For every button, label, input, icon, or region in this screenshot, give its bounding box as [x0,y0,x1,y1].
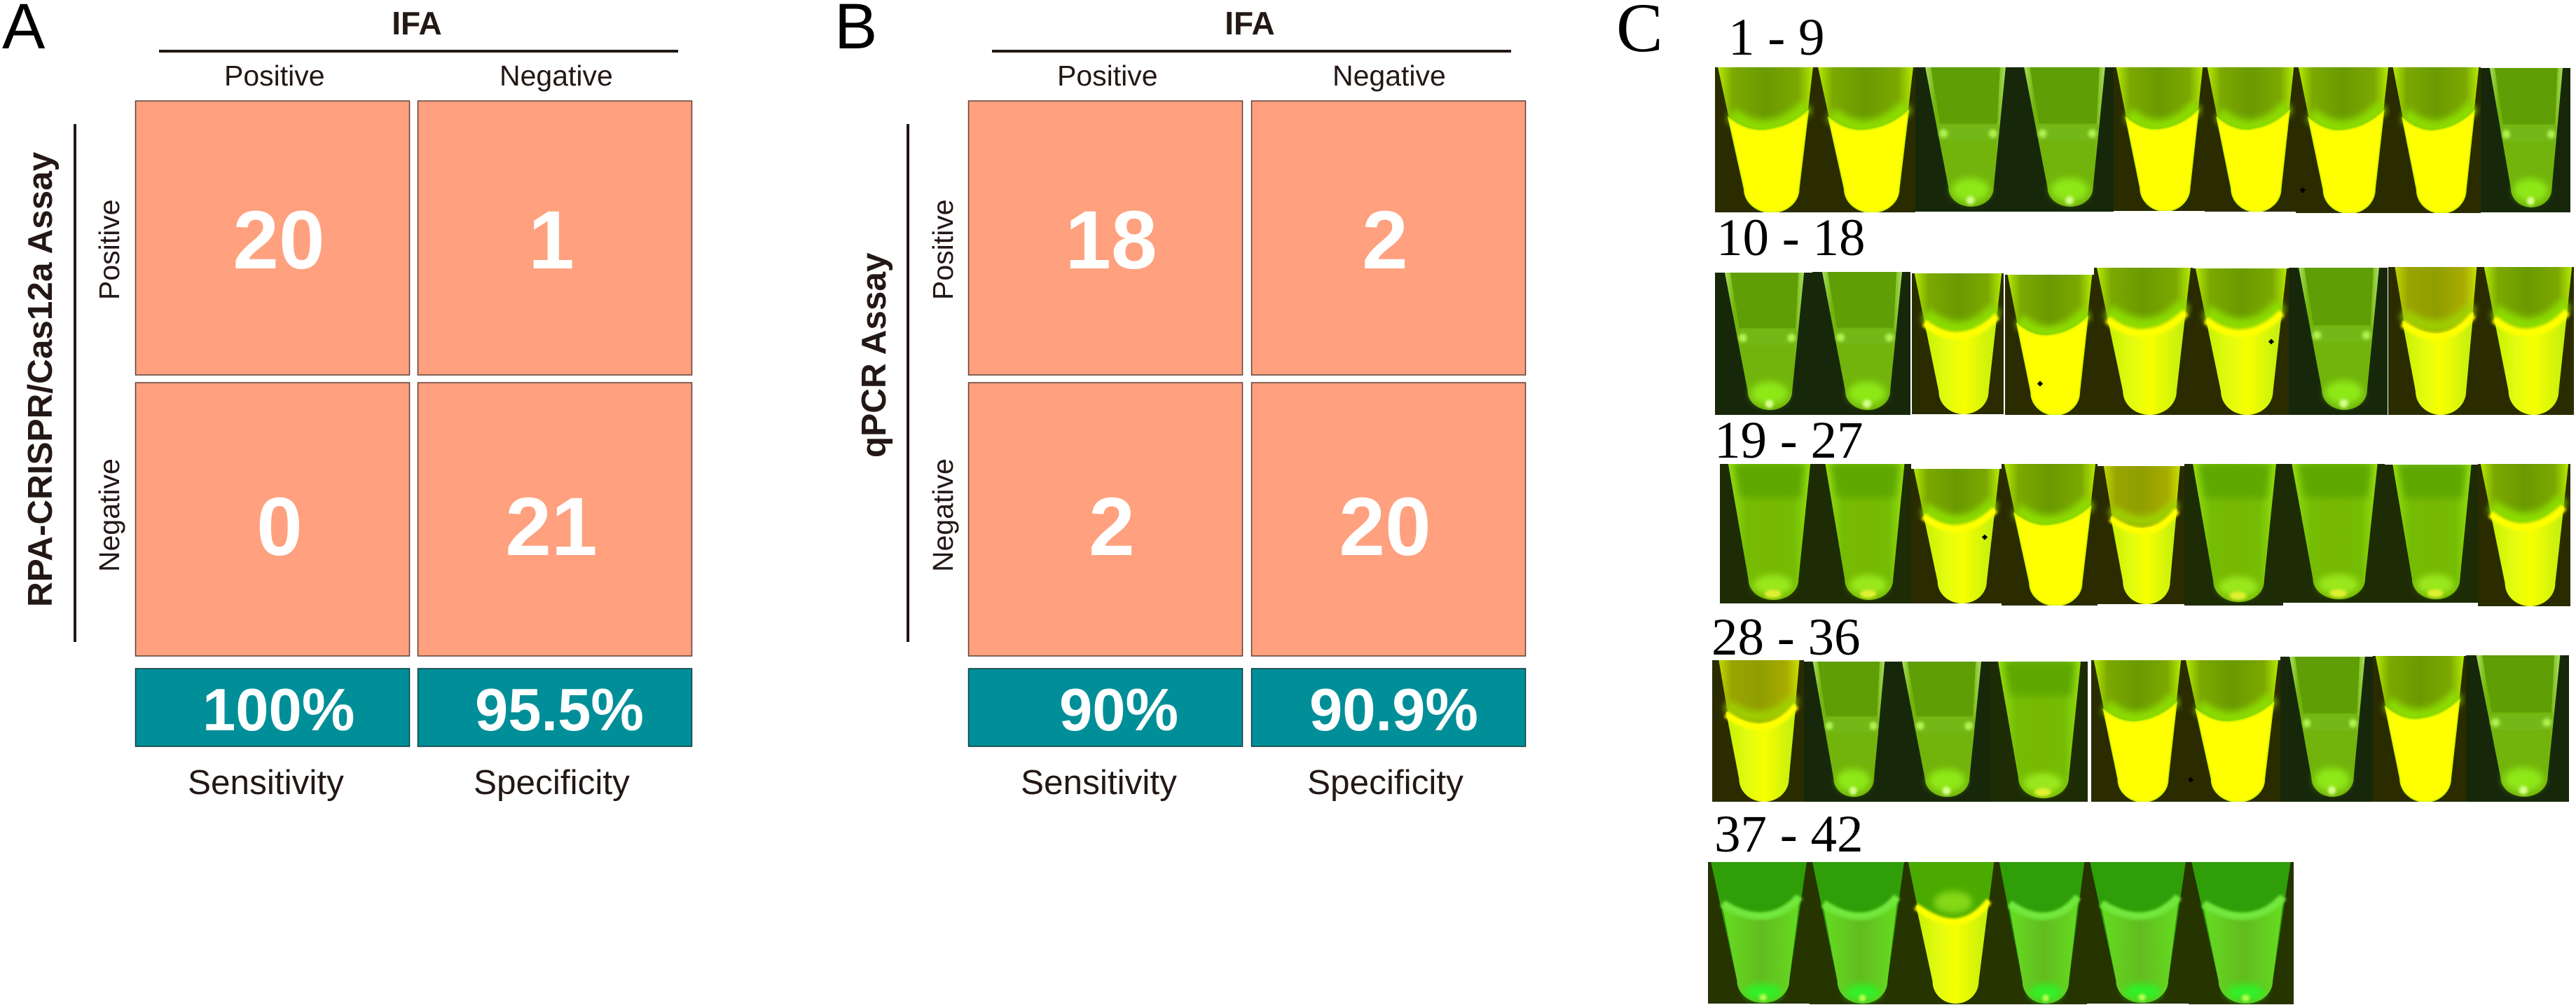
row label 1 - 9: 1 - 9 [1728,8,1824,67]
heading: IFA: IFA [392,5,442,41]
cell: true negative 20: 20 [1339,481,1431,573]
column label: Negative: Negative [500,60,613,92]
cell: false positive 1 [418,101,692,375]
caption: Sensitivity: Sensitivity [188,763,344,802]
specificity value 90.9% [1251,669,1526,746]
caption: Specificity: Specificity [474,763,630,802]
row label: Negative: Negative [927,458,959,572]
sensitivity value 90%: 90% [1059,677,1178,744]
column label: Negative: Negative [1332,60,1446,92]
cell: false positive 1: 1 [528,194,574,287]
sensitivity value 100%: 100% [202,677,354,744]
row title: RPA-CRISPR/Cas12a Assay: RPA-CRISPR/Cas12a Assay [21,151,60,607]
sensitivity value 90% [968,669,1243,746]
specificity value 90.9%: 90.9% [1309,677,1478,744]
row label 28 - 36: 28 - 36 [1711,608,1860,666]
cell: true negative 20 [1251,383,1526,656]
cell: true negative 21: 21 [505,481,598,573]
cell: true negative 21 [418,383,692,656]
row label: Positive: Positive [927,199,959,300]
panel C: fluorescence tube photographs [1616,0,2574,1004]
row label 37 - 42: 37 - 42 [1714,805,1863,863]
tube row 37-42 [1708,862,2294,1004]
row title: qPCR Assay: qPCR Assay [855,252,893,458]
assay rule [74,124,76,642]
assay rule [907,124,909,642]
cell: false negative 2 [968,383,1243,656]
tube row 28-36 [1712,655,2569,802]
cell: true positive 18 [968,101,1243,375]
tube row 1-9 [1715,67,2570,213]
caption: Specificity: Specificity [1307,763,1463,802]
row label 10 - 18: 10 - 18 [1716,209,1865,267]
heading: IFA: IFA [1225,5,1275,41]
cell: true positive 20: 20 [233,194,325,287]
column label: Positive: Positive [224,60,325,92]
cell: true positive 18: 18 [1065,194,1157,287]
cell: false positive 2 [1251,101,1526,375]
cell: false negative 0: 0 [256,481,303,573]
tube row 19-27 [1720,464,2570,606]
specificity value 95.5%: 95.5% [475,677,644,744]
panel A: RPA-CRISPR/Cas12a vs IFA confusion matrix [2,0,692,802]
caption: Sensitivity: Sensitivity [1021,763,1177,802]
sensitivity value 100% [136,669,409,746]
tube row 10-18 [1715,267,2574,415]
column label: Positive: Positive [1057,60,1158,92]
IFA rule [159,50,678,53]
cell: false positive 2: 2 [1362,194,1408,287]
row label 19 - 27: 19 - 27 [1714,411,1863,470]
cell: true positive 20 [136,101,409,375]
row label: Negative: Negative [93,458,125,572]
cell: false negative 0 [136,383,409,656]
panel B: qPCR vs IFA confusion matrix [834,0,1526,802]
IFA rule [992,50,1511,53]
cell: false negative 2: 2 [1089,481,1135,573]
row label: Positive: Positive [93,199,125,300]
specificity value 95.5% [418,669,692,746]
